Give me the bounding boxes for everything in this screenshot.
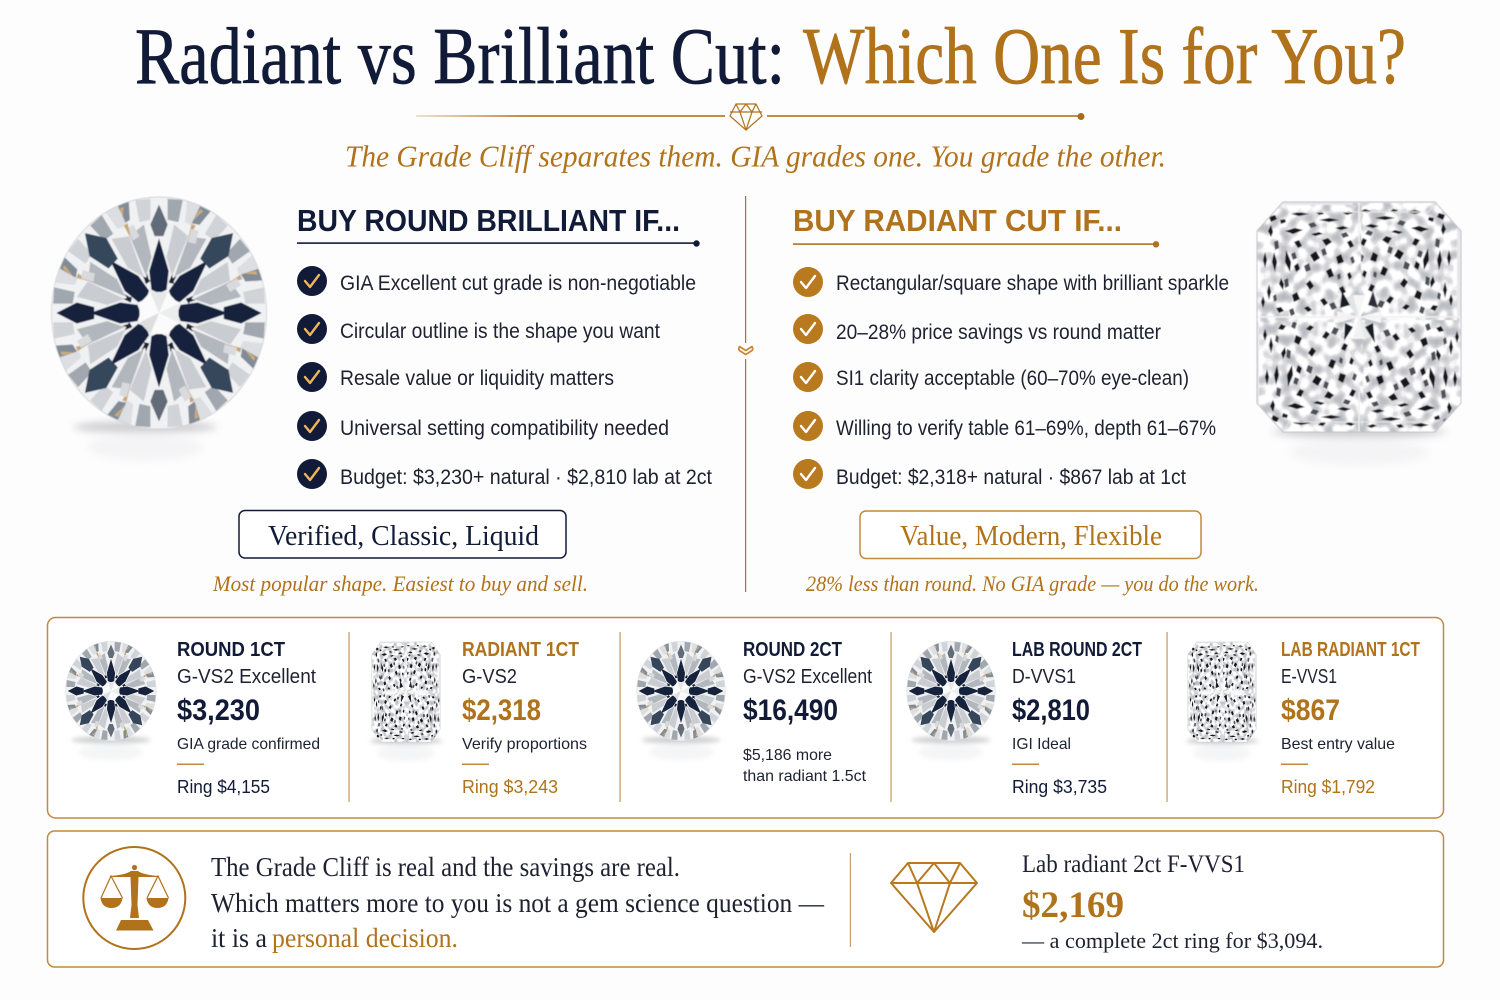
image: round diamond <box>636 641 726 760</box>
conclusion text: it is a <box>211 923 267 953</box>
card: round 2ct: than radiant 1.5ct <box>743 768 867 785</box>
icon: balance scales <box>83 847 185 949</box>
card: lab radiant 1ct <box>1186 639 1420 797</box>
heading underline <box>297 240 700 247</box>
image: round diamond <box>66 641 156 760</box>
card: radiant 1ct <box>370 639 587 797</box>
card: round 2ct: $16,490 <box>743 694 838 727</box>
card: lab round 2ct: D-VVS1 <box>1012 666 1076 688</box>
card: round 2ct: ROUND 2CT <box>743 639 842 661</box>
heading: buy radiant cut: BUY RADIANT CUT IF... <box>793 203 1122 238</box>
center vertical divider <box>739 196 753 592</box>
card: round 1ct: $3,230 <box>177 694 260 727</box>
card: round 1ct <box>66 639 320 797</box>
checklist: radiant: Rectangular/square shape with brilliant sparkle <box>836 272 1229 295</box>
tag box: verified classic liquid <box>239 510 566 558</box>
checklist: radiant: SI1 clarity acceptable (60–70% eye-clean) <box>836 367 1189 390</box>
lab radiant offer: Lab radiant 2ct F-VVS1 <box>1022 851 1245 878</box>
card: round 1ct: ROUND 1CT <box>177 639 285 661</box>
lab radiant offer: — a complete 2ct ring for $3,094. <box>1021 928 1323 953</box>
conclusion text: personal decision. <box>272 923 458 953</box>
card: radiant 1ct: G-VS2 <box>462 666 517 688</box>
panel: price comparison cards <box>48 618 1444 818</box>
card: radiant 1ct: RADIANT 1CT <box>462 639 579 661</box>
lab radiant offer: $2,169 <box>1022 885 1124 926</box>
card: round 2ct <box>636 639 872 785</box>
card: radiant 1ct: Verify proportions <box>462 736 587 753</box>
panel: conclusion <box>48 831 1444 967</box>
heading underline <box>793 241 1159 248</box>
card: round 1ct: Ring $4,155 <box>177 776 270 797</box>
card: round 1ct: G-VS2 Excellent <box>177 666 316 688</box>
title: Radiant vs Brilliant Cut: <box>135 13 785 101</box>
radiant cut diamond image <box>1257 202 1463 466</box>
checklist: round: Universal setting compatibility needed <box>340 417 669 440</box>
conclusion text: The Grade Cliff is real and the savings are real. <box>211 852 680 882</box>
checklist: round <box>297 266 712 489</box>
card: lab radiant 1ct: E-VVS1 <box>1281 666 1337 688</box>
image: radiant diamond <box>1186 642 1258 761</box>
heading: buy round brilliant: BUY ROUND BRILLIANT IF... <box>297 203 680 238</box>
checklist: radiant: Budget: $2,318+ natural · $867 lab at 1ct <box>836 466 1186 489</box>
card: round 2ct: $5,186 more <box>743 747 832 764</box>
lab radiant offer <box>1021 851 1323 953</box>
card: lab round 2ct: IGI Ideal <box>1012 736 1071 753</box>
round brilliant diamond image <box>51 196 267 461</box>
checklist: round: Circular outline is the shape you want <box>340 320 660 343</box>
checklist: round: GIA Excellent cut grade is non-negotiable <box>340 272 696 295</box>
caption: round: Most popular shape. Easiest to buy and sell. <box>212 571 588 596</box>
tag box: value modern flexible <box>860 511 1201 558</box>
card: round 2ct: G-VS2 Excellent <box>743 666 872 688</box>
conclusion text: Which matters more to you is not a gem science question — <box>211 888 825 918</box>
tag box: value modern flexible: Value, Modern, Flexible <box>900 520 1162 552</box>
card: radiant 1ct: $2,318 <box>462 694 541 727</box>
checklist: radiant: 20–28% price savings vs round matter <box>836 321 1161 344</box>
checklist: round: Resale value or liquidity matters <box>340 367 614 390</box>
icon: diamond outline <box>891 863 977 932</box>
panel: buy radiant cut <box>793 203 1259 596</box>
title <box>135 13 1406 101</box>
card: lab radiant 1ct: $867 <box>1281 694 1340 727</box>
card: lab round 2ct <box>906 639 1142 797</box>
card: lab radiant 1ct: Ring $1,792 <box>1281 776 1375 797</box>
subtitle: The Grade Cliff separates them. GIA grades one. You grade the other. <box>345 140 1166 174</box>
panel: buy round brilliant <box>212 203 712 596</box>
card: round 1ct: GIA grade confirmed <box>177 736 320 753</box>
card: lab round 2ct: Ring $3,735 <box>1012 776 1107 797</box>
card: lab radiant 1ct: LAB RADIANT 1CT <box>1281 639 1420 661</box>
tag box: verified classic liquid: Verified, Classic, Liquid <box>268 520 539 552</box>
conclusion text <box>211 852 825 953</box>
checklist: radiant: Willing to verify table 61–69%, depth 61–67% <box>836 417 1216 440</box>
checklist: round: Budget: $3,230+ natural · $2,810 lab at 2ct <box>340 466 712 489</box>
title divider with diamond <box>416 104 1084 130</box>
caption: radiant: 28% less than round. No GIA grade — you do the work. <box>806 571 1259 596</box>
image: round diamond <box>906 641 996 760</box>
card: lab round 2ct: $2,810 <box>1012 694 1090 727</box>
image: radiant diamond <box>370 642 442 761</box>
card: radiant 1ct: Ring $3,243 <box>462 776 558 797</box>
card: lab radiant 1ct: Best entry value <box>1281 736 1395 753</box>
card: lab round 2ct: LAB ROUND 2CT <box>1012 639 1142 661</box>
checklist: radiant <box>793 267 1229 489</box>
